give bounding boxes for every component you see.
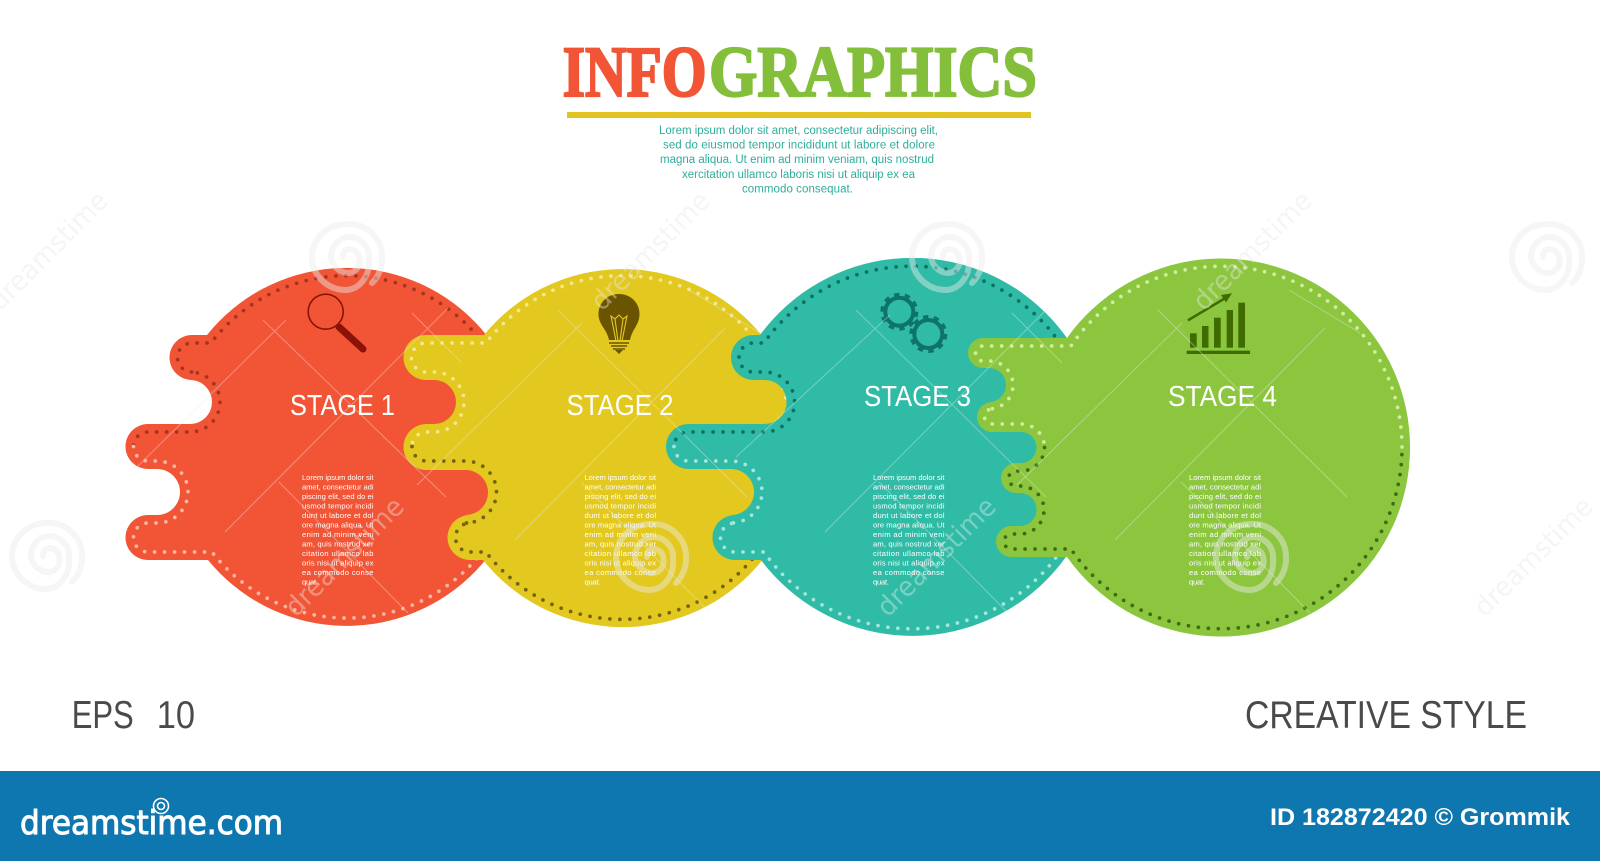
- text block: stage 1: usmod tempor incidi: [302, 502, 374, 510]
- text block: stage 1: amet, consectetur adi: [302, 482, 374, 492]
- text block: stage 1: piscing elit, sed do ei: [302, 492, 374, 501]
- watermark overlay: [0, 185, 1600, 623]
- text block: stage 4: ore magna aliqua. Ut: [1189, 520, 1262, 530]
- text block: stage 4: amet, consectetur adi: [1189, 482, 1261, 492]
- text block: stage 3: Lorem ipsum dolor sit: [873, 473, 945, 482]
- footer label: EPS 10: 10: [157, 694, 195, 737]
- title underline: [567, 112, 1031, 118]
- text block: stage 2: piscing elit, sed do ei: [584, 492, 656, 501]
- footer band: [0, 771, 1600, 861]
- icon: gears: [882, 295, 945, 351]
- intro text: [659, 125, 938, 196]
- heading: stage 1: STAGE 1: [290, 390, 395, 422]
- title: [563, 32, 1037, 112]
- text block: stage 2: ea commodo conse: [584, 568, 656, 577]
- text block: stage 3: enim ad minim veni: [873, 530, 945, 539]
- watermark overlay: dreamstime: [585, 185, 717, 317]
- text block: stage 4: ea commodo conse: [1189, 568, 1261, 577]
- title: INFO: [563, 32, 707, 112]
- intro text: magna aliqua. Ut enim ad minim veniam, quis nostrud: [660, 154, 934, 166]
- text block: stage 2: citation ullamco lab: [584, 549, 656, 558]
- intro text: sed do eiusmod tempor incididunt ut labore et dolore: [663, 140, 935, 152]
- panel: stage 2 blob: [404, 269, 802, 627]
- text block: stage 3: [873, 473, 945, 586]
- text block: stage 4: dunt ut labore et dol: [1189, 511, 1261, 520]
- watermark overlay: dreamstime: [871, 491, 1003, 623]
- text block: stage 3: oris nisi ut aliquip ex: [873, 558, 945, 568]
- text block: stage 3: usmod tempor incidi: [873, 502, 945, 510]
- text block: stage 1: am, quis nostrud xer: [302, 540, 374, 548]
- text block: stage 4: am, quis nostrud xer: [1189, 540, 1261, 548]
- image id credit: ID 182872420 © Grommik: [1270, 804, 1571, 831]
- panel: stage 1 blob: [126, 268, 526, 626]
- text block: stage 4: enim ad minim veni: [1189, 530, 1261, 539]
- intro text: commodo consequat.: [742, 184, 853, 196]
- footer label: creative style: CREATIVE STYLE: [1245, 694, 1527, 737]
- text block: stage 1: citation ullamco lab: [302, 549, 374, 558]
- text block: stage 1: quat.: [302, 578, 318, 586]
- text block: stage 2: quat.: [584, 578, 600, 586]
- panel: stage 3 blob: [666, 258, 1101, 636]
- text block: stage 2: dunt ut labore et dol: [584, 511, 656, 520]
- text block: stage 3: amet, consectetur adi: [873, 482, 945, 492]
- text block: stage 1: enim ad minim veni: [302, 530, 374, 539]
- text block: stage 2: ore magna aliqua. Ut: [584, 520, 657, 530]
- footer label: EPS 10: EPS: [72, 694, 134, 737]
- text block: stage 4: Lorem ipsum dolor sit: [1189, 473, 1262, 482]
- footer label: EPS 10: [72, 694, 195, 737]
- text block: stage 1: [302, 473, 374, 586]
- panel: stage 4 blob: [968, 258, 1410, 636]
- text block: stage 3: ea commodo conse: [873, 568, 944, 577]
- text block: stage 3: citation ullamco lab: [873, 549, 944, 558]
- heading: stage 2: STAGE 2: [566, 390, 674, 422]
- heading: stage 3: STAGE 3: [864, 381, 971, 413]
- intro text: Lorem ipsum dolor sit amet, consectetur adipiscing elit,: [659, 125, 938, 137]
- icon: light bulb: [598, 294, 640, 354]
- text block: stage 3: am, quis nostrud xer: [873, 540, 945, 548]
- text block: stage 2: oris nisi ut aliquip ex: [584, 558, 656, 568]
- text block: stage 3: dunt ut labore et dol: [873, 511, 945, 520]
- watermark overlay: dreamstime: [279, 491, 411, 623]
- text block: stage 2: usmod tempor incidi: [584, 502, 656, 510]
- text block: stage 1: ea commodo conse: [302, 568, 374, 577]
- text block: stage 4: piscing elit, sed do ei: [1189, 492, 1261, 501]
- title: GRAPHICS: [709, 32, 1037, 112]
- text block: stage 2: Lorem ipsum dolor sit: [584, 473, 657, 482]
- text block: stage 2: am, quis nostrud xer: [584, 540, 656, 548]
- text block: stage 1: ore magna aliqua. Ut: [302, 520, 374, 530]
- text block: stage 1: dunt ut labore et dol: [302, 511, 374, 520]
- text block: stage 2: [584, 473, 657, 586]
- text block: stage 1: Lorem ipsum dolor sit: [302, 473, 374, 482]
- text block: stage 4: usmod tempor incidi: [1189, 502, 1261, 510]
- intro text: xercitation ullamco laboris nisi ut aliquip ex ea: [682, 169, 916, 181]
- text block: stage 2: enim ad minim veni: [584, 530, 656, 539]
- watermark overlay: dreamstime: [1187, 185, 1319, 317]
- dreamstime logo: dreamstime.com: [20, 803, 283, 842]
- text block: stage 4: quat.: [1189, 578, 1205, 586]
- icon: magnifying glass: [308, 294, 363, 349]
- text block: stage 4: oris nisi ut aliquip ex: [1189, 558, 1261, 568]
- heading: stage 4: STAGE 4: [1168, 381, 1277, 413]
- text block: stage 1: oris nisi ut aliquip ex: [302, 558, 374, 568]
- text block: stage 2: amet, consectetur adi: [584, 482, 656, 492]
- text block: stage 3: quat.: [873, 578, 889, 586]
- text block: stage 4: citation ullamco lab: [1189, 549, 1261, 558]
- icon: growth chart: [1187, 293, 1250, 354]
- text block: stage 3: piscing elit, sed do ei: [873, 492, 945, 501]
- text block: stage 3: ore magna aliqua. Ut: [873, 520, 945, 530]
- text block: stage 4: [1189, 473, 1262, 586]
